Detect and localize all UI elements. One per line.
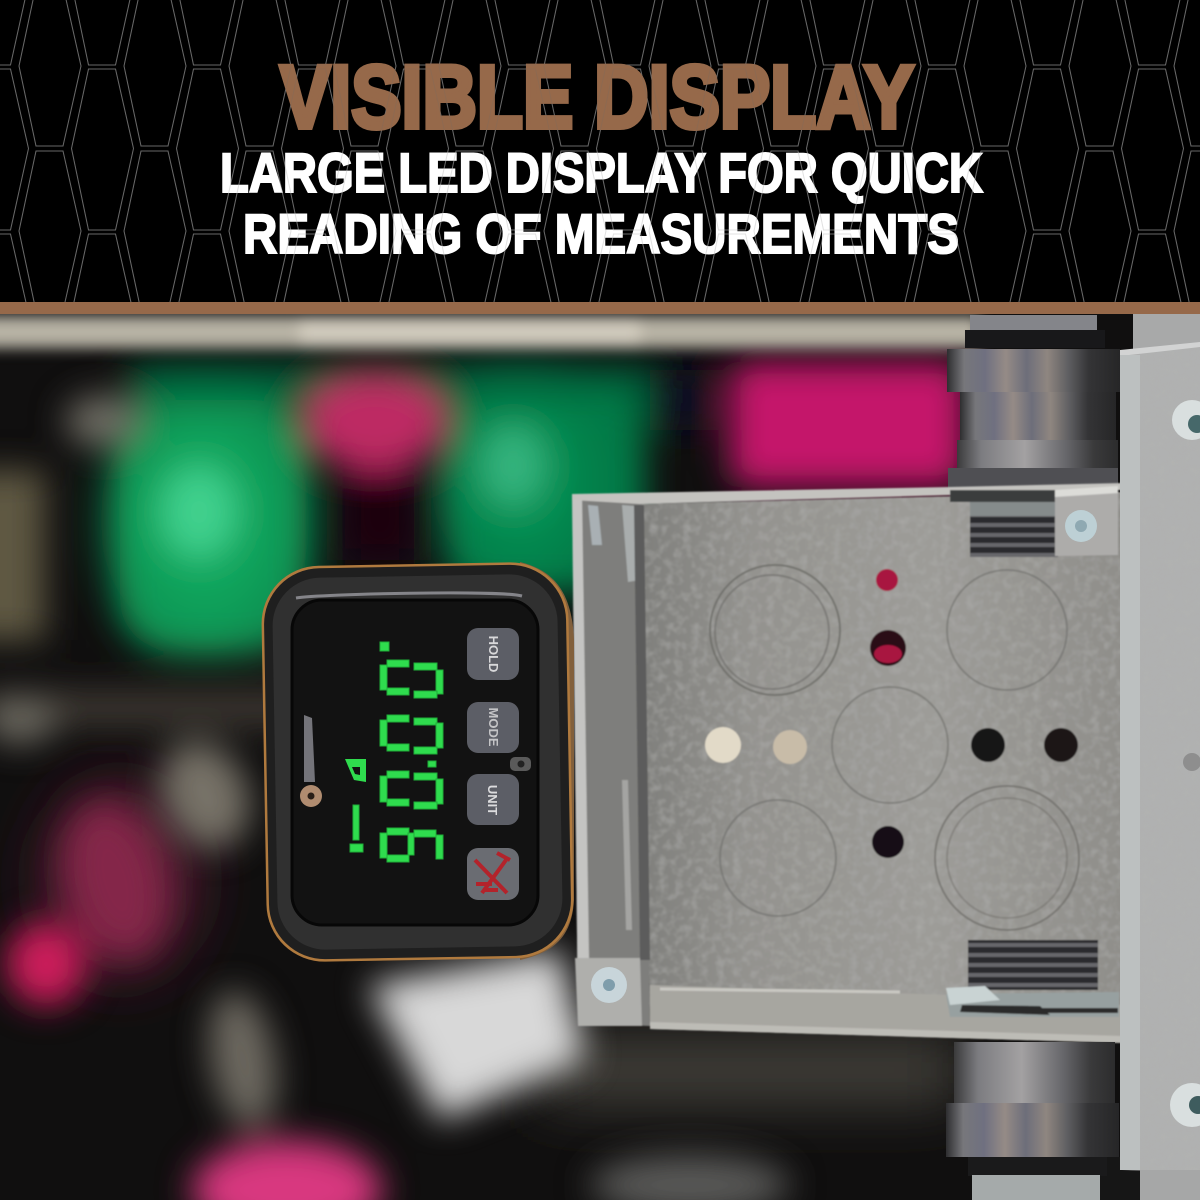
decimal dot bbox=[380, 642, 389, 651]
sensor dot bbox=[510, 757, 531, 771]
button: power bbox=[467, 848, 519, 900]
hexagon pattern bbox=[0, 0, 1200, 302]
button: unit: UNIT bbox=[485, 785, 500, 815]
knockouts bbox=[710, 565, 1079, 930]
button: hold: HOLD bbox=[486, 636, 501, 672]
bezel highlight bbox=[296, 593, 522, 598]
box top rim bbox=[572, 483, 1122, 504]
screw tab bbox=[575, 958, 642, 1026]
screws bbox=[591, 400, 1200, 1127]
LED digits bbox=[345, 642, 443, 862]
digit 0 third with dot bbox=[380, 761, 443, 809]
holes bbox=[705, 569, 1078, 858]
box bottom lip bbox=[650, 985, 1122, 1043]
subtitle line 2: READING OF MEASUREMENTS bbox=[243, 203, 959, 265]
unit mark bbox=[345, 759, 366, 782]
junction box bbox=[572, 483, 1122, 1043]
box back panel bbox=[640, 492, 1122, 1040]
title: VISIBLE DISPLAY bbox=[280, 46, 914, 146]
photo background: blurred electrical panel bbox=[0, 314, 1200, 1200]
device body bbox=[261, 561, 574, 963]
laser measure device bbox=[261, 561, 574, 963]
digit 0 second bbox=[380, 715, 443, 754]
tan housing behind device bbox=[520, 562, 574, 960]
subtitle line 1: LARGE LED DISPLAY FOR QUICK bbox=[220, 142, 983, 204]
button: mode: MODE bbox=[486, 708, 501, 747]
top conduit fitting bbox=[947, 315, 1120, 488]
exclamation mark bbox=[350, 805, 363, 852]
top threaded connector bbox=[950, 490, 1055, 502]
button: unit bbox=[467, 774, 519, 825]
digit 0 bbox=[380, 660, 443, 698]
bottom conduit fitting bbox=[946, 1042, 1140, 1200]
brand logo bbox=[300, 715, 322, 807]
button: mode bbox=[467, 702, 519, 753]
header panel bbox=[0, 0, 1200, 314]
box left flange bbox=[572, 494, 650, 1026]
display screen bbox=[292, 600, 538, 925]
copper rule bbox=[0, 302, 1200, 314]
bottom threaded connector bbox=[968, 940, 1098, 990]
side wall of box bbox=[1120, 314, 1200, 1200]
button: hold bbox=[467, 628, 519, 680]
digit 6 bbox=[380, 828, 443, 862]
